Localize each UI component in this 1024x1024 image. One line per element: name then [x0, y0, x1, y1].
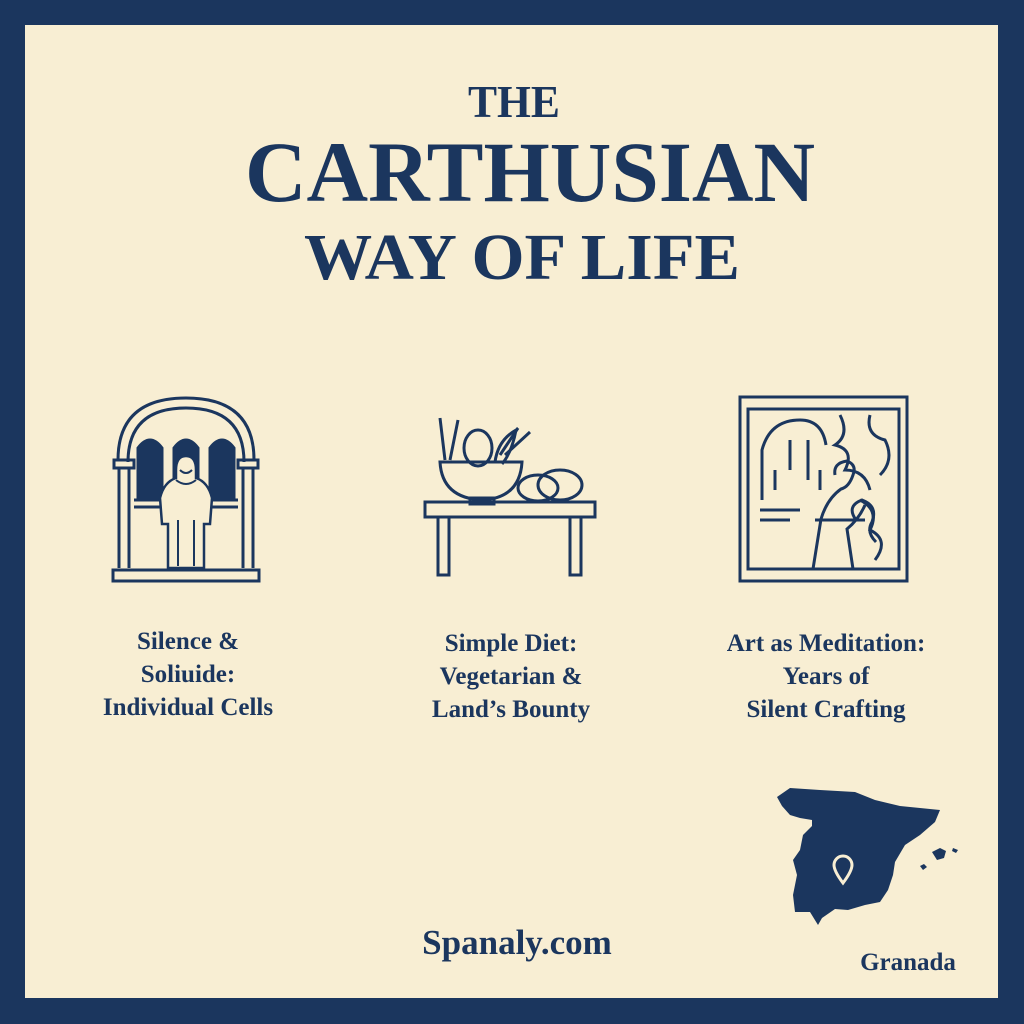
- location label: Granada: [860, 949, 956, 976]
- title: [245, 76, 815, 294]
- caption: diet: Land’s Bounty: [432, 696, 590, 723]
- map: Spain: [777, 788, 958, 925]
- icon: bowl and bread on table: [425, 418, 595, 575]
- caption: silence: Individual Cells: [103, 694, 273, 721]
- caption: silence: Soliuide:: [141, 661, 235, 688]
- caption: diet: [432, 630, 590, 723]
- caption: art: Years of: [783, 663, 869, 690]
- caption: art: Art as Meditation:: [727, 630, 925, 657]
- title: WAY OF LIFE: [304, 221, 740, 294]
- caption: silence: [103, 628, 273, 721]
- caption: art: Silent Crafting: [746, 696, 906, 723]
- icon: framed monk crafting: [740, 397, 907, 581]
- icon: cloister arch with monk: [113, 398, 259, 581]
- caption: silence: Silence &: [137, 628, 239, 655]
- icon: location pin: [834, 856, 852, 883]
- title: THE: [468, 76, 560, 127]
- caption: diet: Vegetarian &: [440, 663, 582, 690]
- website footer: Spanaly.com: [422, 923, 612, 962]
- caption: diet: Simple Diet:: [445, 630, 577, 657]
- caption: art: [727, 630, 925, 723]
- title: CARTHUSIAN: [245, 124, 815, 220]
